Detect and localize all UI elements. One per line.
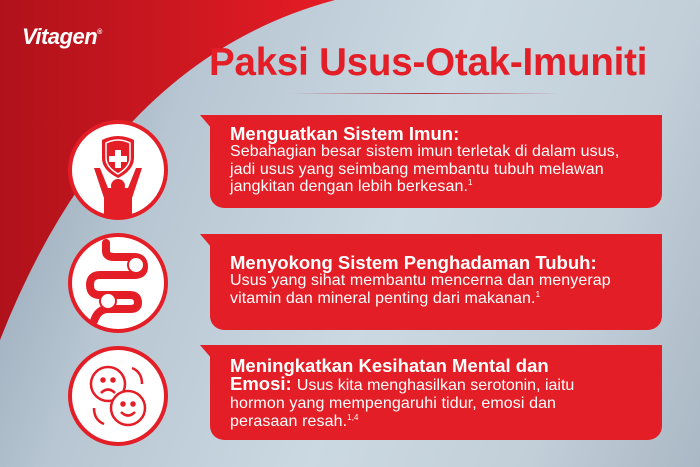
title: Paksi Usus-Otak-Imuniti (209, 41, 647, 84)
icon: faces (68, 346, 168, 446)
panel: mental health (210, 345, 662, 440)
panel: digestion: Menyokong Sistem Penghadaman Tubuh: (230, 252, 597, 273)
panel: immune: Menguatkan Sistem Imun: (230, 123, 459, 144)
logo: Vitagen® (22, 24, 102, 49)
panel: mental health: perasaan resah.1,4 (230, 412, 359, 430)
panel: digestion (210, 234, 662, 330)
panel: immune (210, 115, 662, 208)
panel: mental health: Meningkatkan Kesihatan Mental dan (230, 355, 549, 376)
icon: intestine (68, 233, 168, 333)
icon: shield person (68, 120, 168, 220)
panel: mental health: Emosi: Usus kita menghasilkan serotonin, iaitu (230, 373, 574, 394)
panel: mental health: hormon yang mempengaruhi tidur, emosi dan (230, 395, 556, 412)
panel: digestion: vitamin dan mineral penting dari makanan.1 (230, 290, 540, 306)
panel: digestion: Usus yang sihat membantu mencerna dan menyerap (230, 272, 611, 289)
panel: immune: jadi usus yang seimbang membantu tubuh melawan (230, 160, 604, 178)
panel: immune: jangkitan dengan lebih berkesan.1 (230, 178, 473, 195)
panel: immune: Sebahagian besar sistem imun terletak di dalam usus, (230, 143, 619, 160)
